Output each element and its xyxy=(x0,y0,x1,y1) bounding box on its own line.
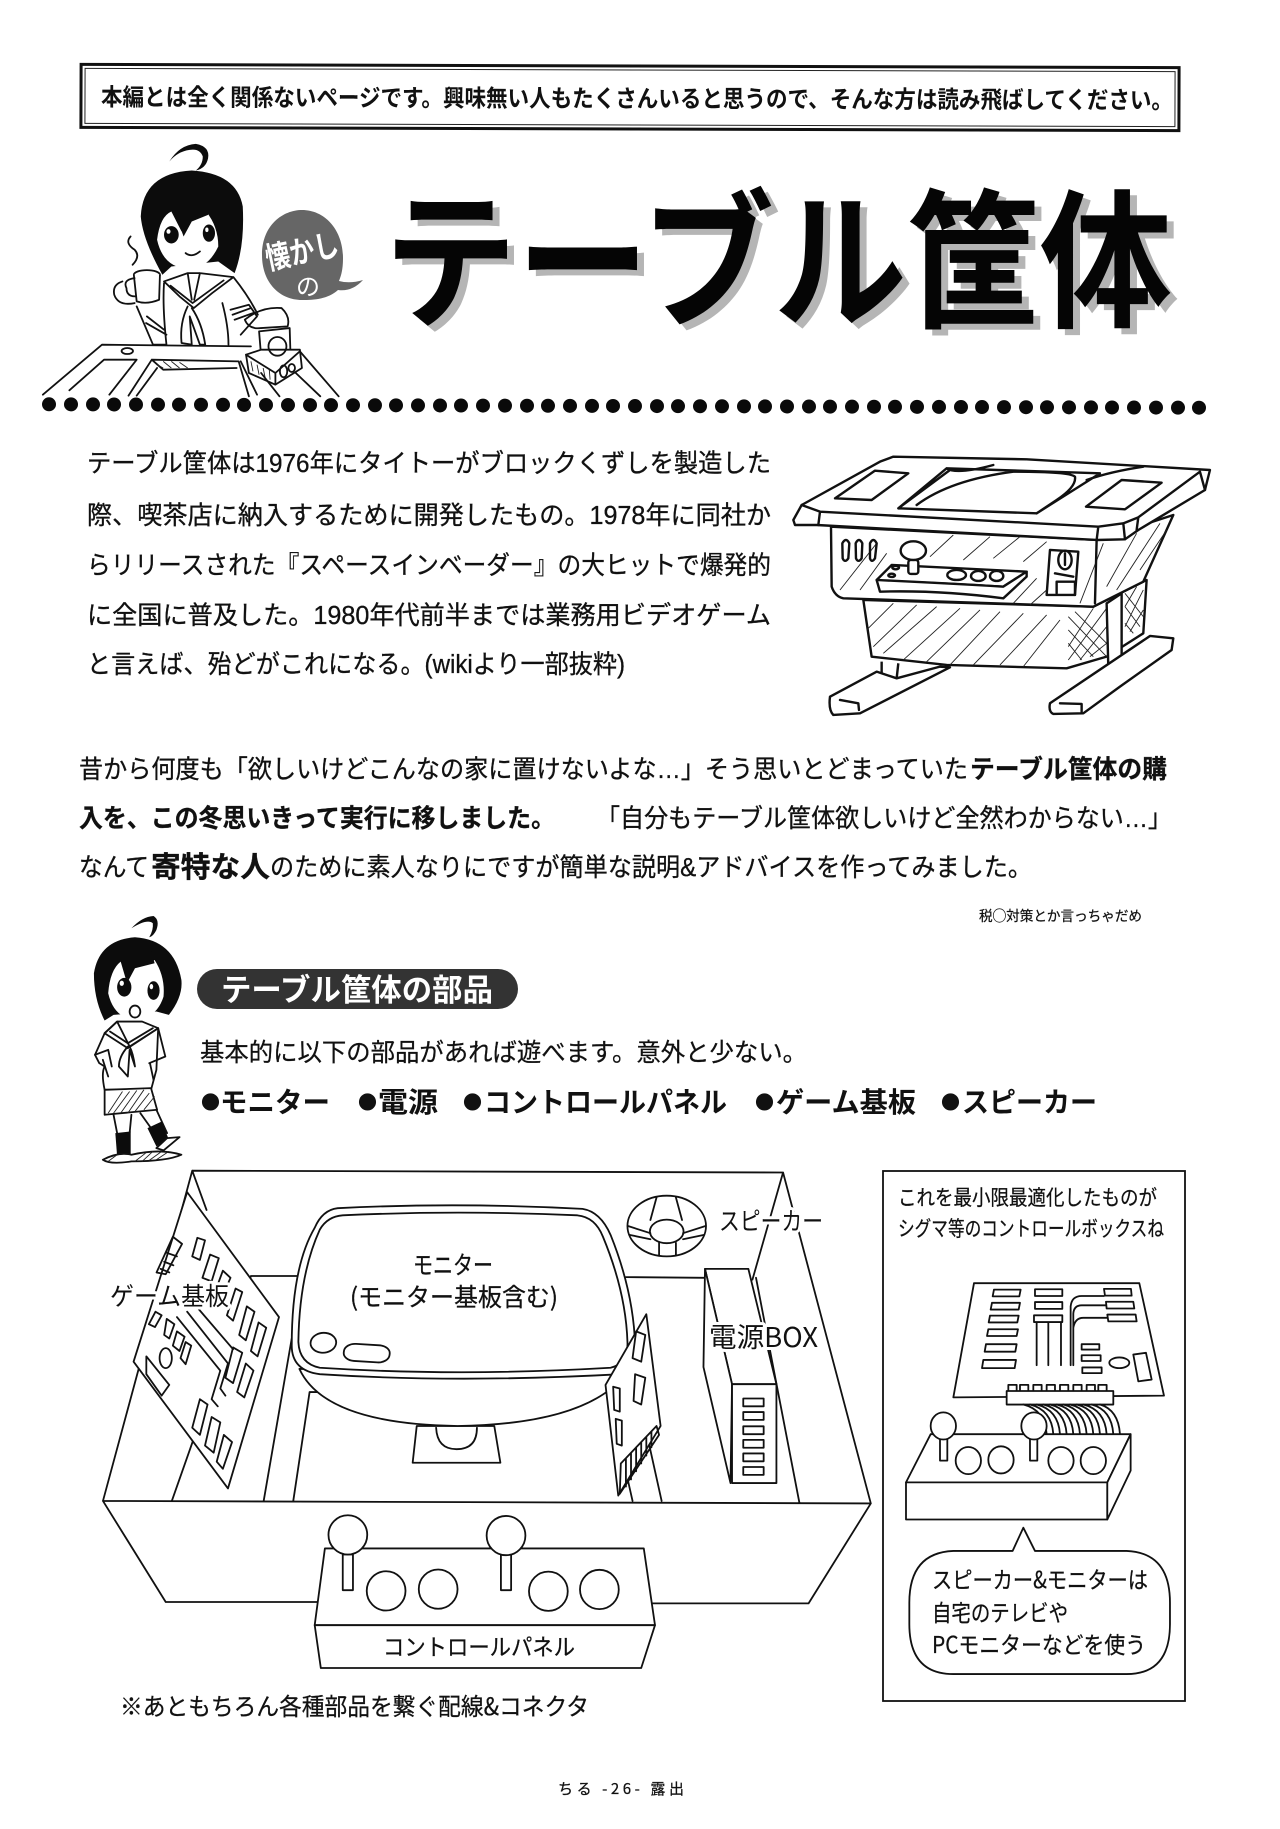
parts bullet list xyxy=(201,1081,1097,1121)
diagram: inside of the cabinet xyxy=(103,1171,871,1668)
speech bubble: 懐かしの: の xyxy=(296,274,320,301)
circuit board and control box drawing xyxy=(906,1283,1170,1674)
panel caption: これを最小限最適化したものが xyxy=(898,1182,1157,1212)
dotted divider xyxy=(42,397,1206,415)
notice box: 本編とは全く関係ないページです。興味無い人もたくさんいると思うので、そんな方は読み飛ばしてください。 xyxy=(101,84,1173,115)
statement paragraph: 入を、この冬思いきって実行に移しました。 xyxy=(79,805,555,833)
intro text block: らリリースされた『スペースインベーダー』の大ヒットで爆発的 xyxy=(87,552,771,580)
label: speaker: スピーカー xyxy=(719,1202,823,1238)
illustration: table cabinet xyxy=(793,457,1210,715)
statement paragraph: テーブル筐体の購 xyxy=(970,755,1167,784)
parts bullet list: ● xyxy=(201,1088,220,1115)
label: game board: ゲーム基板 xyxy=(110,1277,229,1313)
statement paragraph: 「自分もテーブル筐体欲しいけど全然わからない…」 xyxy=(596,805,1172,833)
statement paragraph: なんて xyxy=(79,854,149,882)
parts bullet list: ゲーム基板 xyxy=(776,1081,916,1121)
panel caption xyxy=(898,1182,1164,1243)
intro text block: に全国に普及した。1980年代前半までは業務用ビデオゲーム xyxy=(87,602,771,630)
label: monitor board: (モニター基板含む) xyxy=(350,1278,558,1314)
statement paragraph: 昔から何度も「欲しいけどこんなの家に置けないよな…」そう思いとどまっていた xyxy=(79,756,968,784)
illustration: standing girl xyxy=(94,916,182,1163)
parts bullet list: 電源 xyxy=(378,1081,438,1121)
label: control panel: コントロールパネル xyxy=(383,1628,575,1662)
section heading pill: テーブル筐体の部品 xyxy=(221,973,493,1008)
label: monitor: モニター xyxy=(413,1246,493,1282)
speech bubble: 懐かしの xyxy=(262,210,363,301)
intro text block: と言えば、殆どがこれになる。(wikiより一部抜粋) xyxy=(87,651,625,679)
speech bubble text: 自宅のテレビや xyxy=(932,1594,1068,1628)
parts bullet list: ● xyxy=(755,1088,774,1115)
speech bubble: 懐かしの: 懐かし xyxy=(262,227,342,277)
label: power box: 電源BOX xyxy=(709,1316,819,1355)
page footer: ちる -26- 露出 xyxy=(558,1778,684,1799)
speech bubble text: スピーカー&モニターは xyxy=(932,1561,1148,1595)
parts bullet list: ● xyxy=(358,1088,377,1115)
footnote: ※あともちろん各種部品を繋ぐ配線&コネクタ xyxy=(120,1687,589,1722)
speech bubble text: PCモニターなどを使う xyxy=(932,1626,1146,1660)
notice box xyxy=(81,64,1179,131)
statement paragraph xyxy=(79,755,1172,884)
parts bullet list: モニター xyxy=(220,1081,330,1121)
main title with drop shadow: テーブル筐体 xyxy=(391,186,1179,354)
parts bullet list: ● xyxy=(941,1088,960,1115)
intro text block: テーブル筐体は1976年にタイトーがブロックくずしを製造した xyxy=(87,450,771,478)
parts bullet list: ● xyxy=(463,1088,482,1115)
illustration: girl with coffee at table cabinet xyxy=(43,144,339,396)
parts bullet list: コントロールパネル xyxy=(484,1081,727,1121)
cabinet box linework xyxy=(103,1171,871,1668)
speech bubble text xyxy=(932,1561,1148,1660)
parts bullet list: スピーカー xyxy=(962,1081,1097,1121)
statement paragraph: のために素人なりにですが簡単な説明&アドバイスを作ってみました。 xyxy=(270,854,1032,882)
panel caption: シグマ等のコントロールボックスね xyxy=(898,1213,1164,1243)
intro text block xyxy=(87,450,771,679)
main title with drop shadow: テーブル筐体 xyxy=(384,180,1172,348)
small aside note: 税◯対策とか言っちゃだめ xyxy=(979,906,1142,926)
intro text block: 際、喫茶店に納入するために開発したもの。1978年に同社か xyxy=(87,502,771,530)
side panel: control box xyxy=(883,1171,1185,1701)
statement paragraph: 寄特な人 xyxy=(151,851,270,884)
parts intro sentence: 基本的に以下の部品があれば遊べます。意外と少ない。 xyxy=(200,1033,807,1069)
